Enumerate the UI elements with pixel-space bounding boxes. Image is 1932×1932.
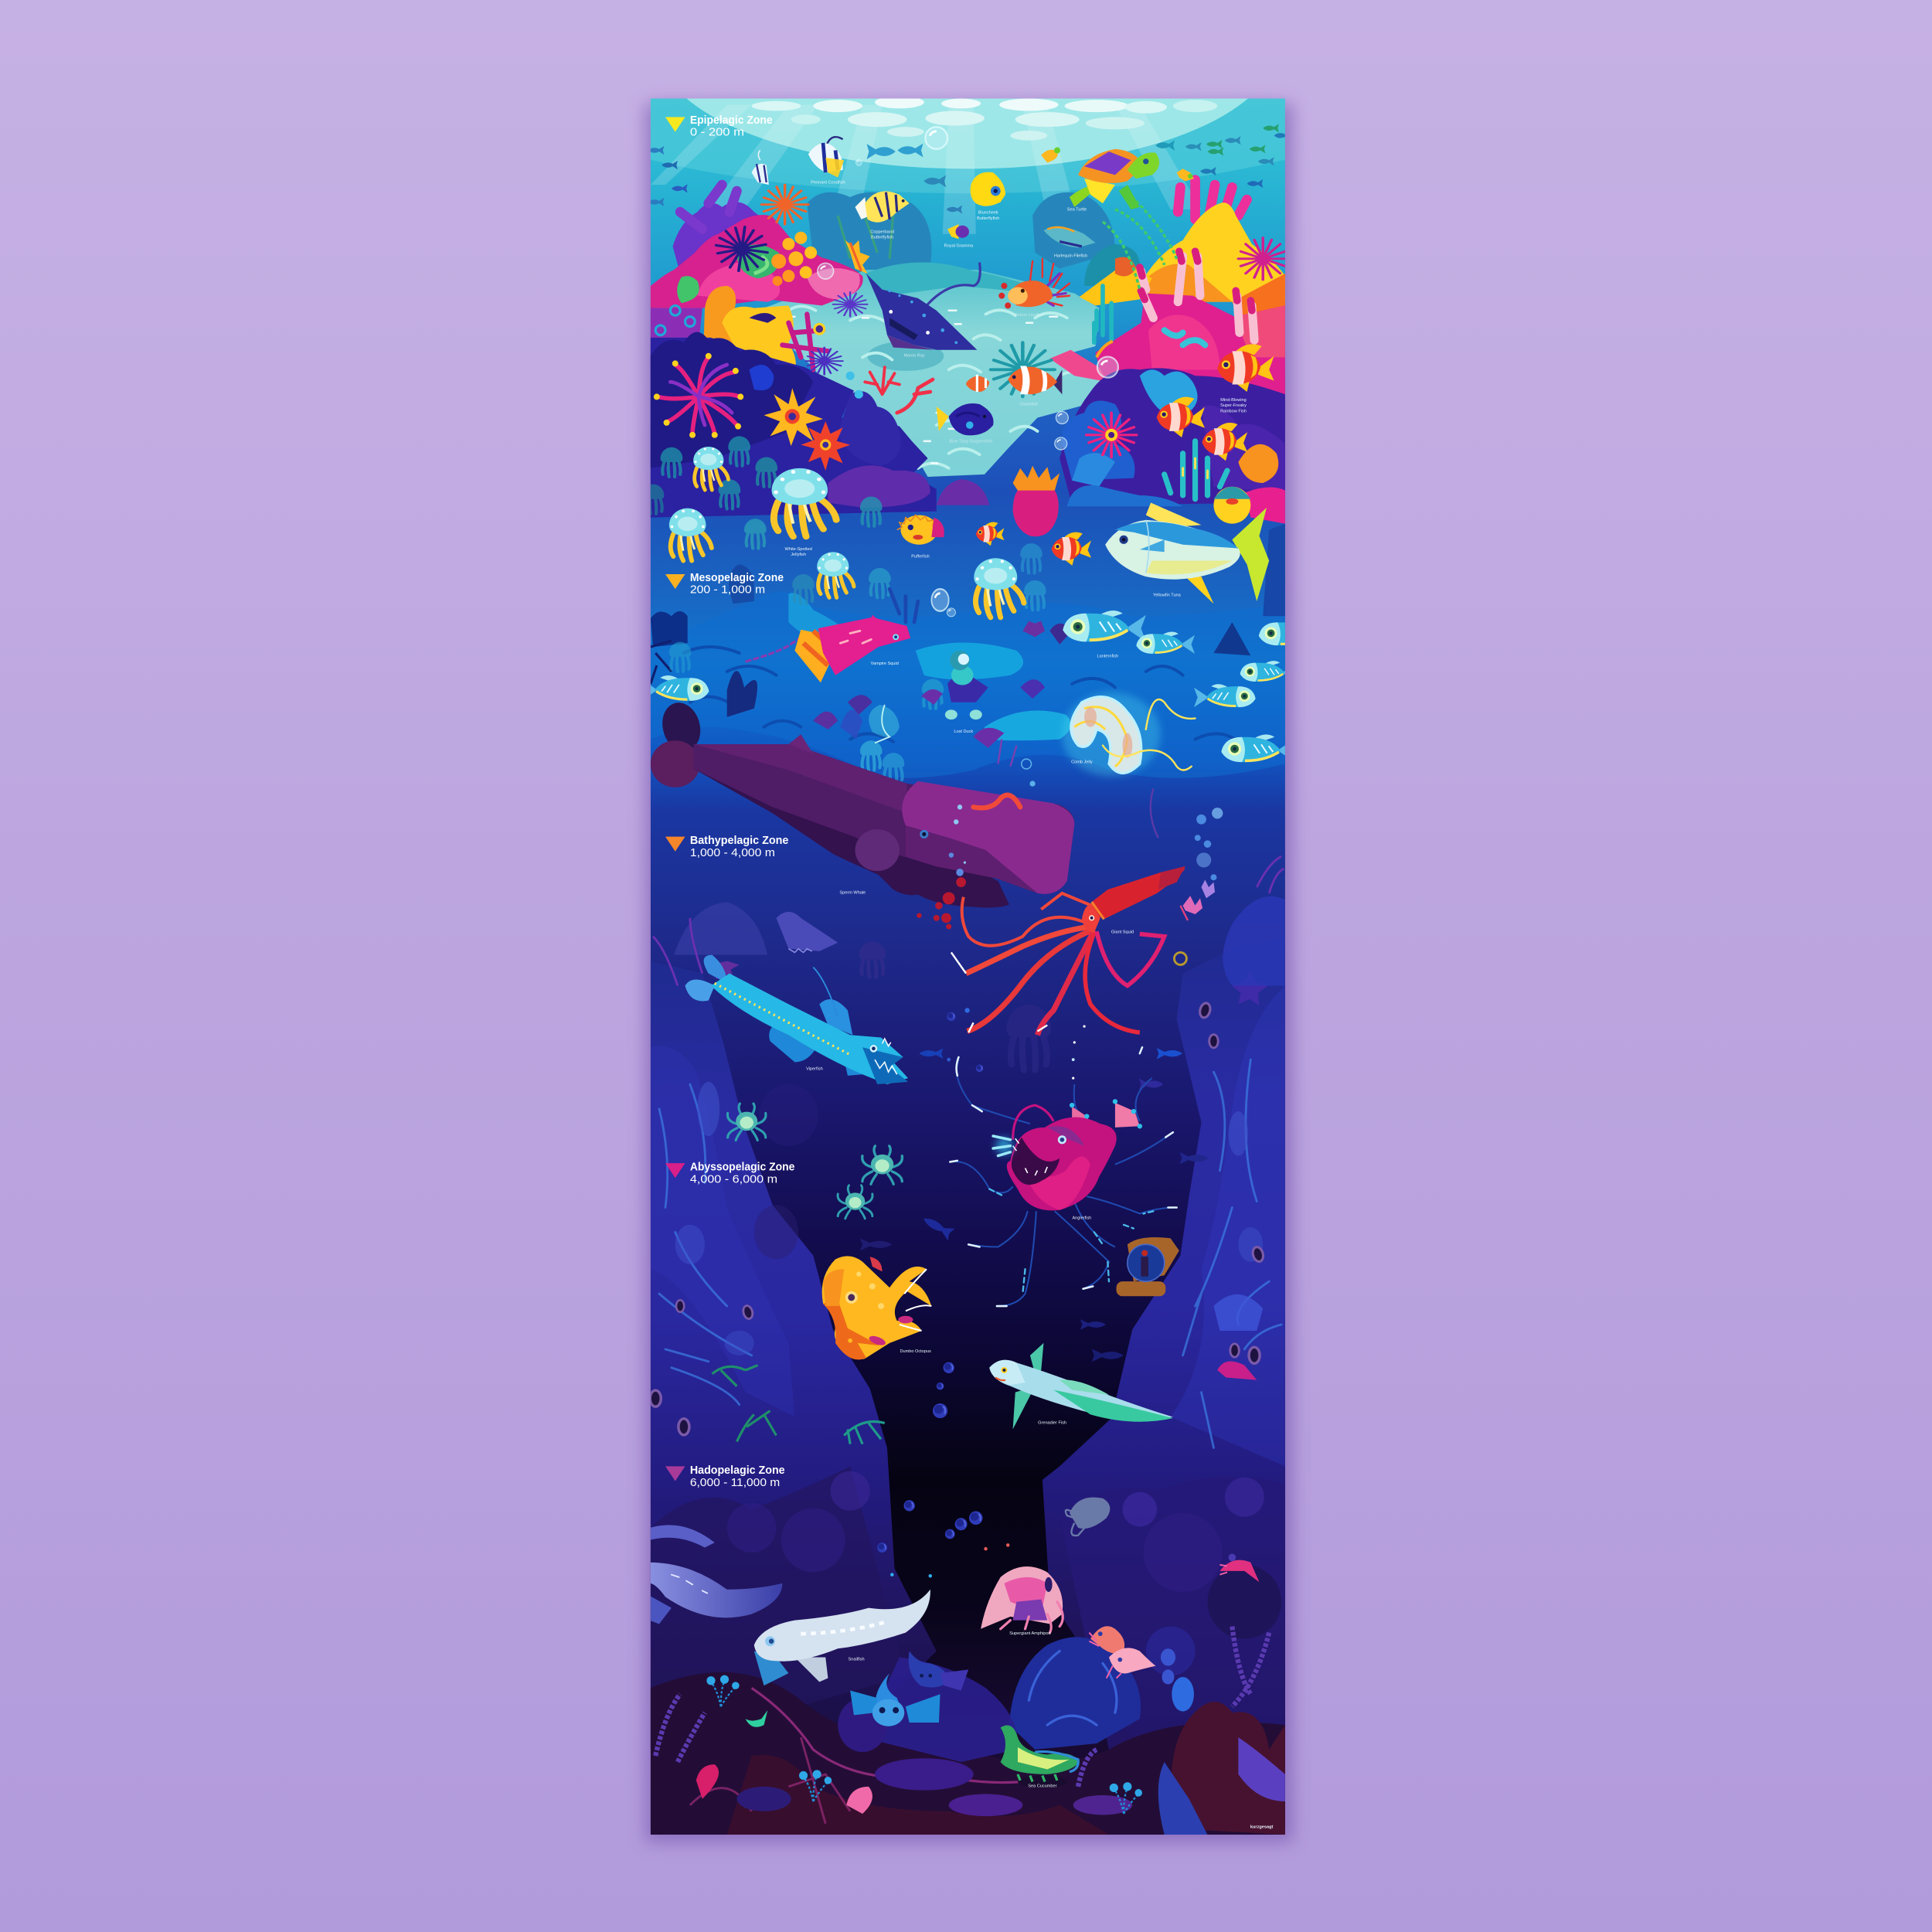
big anemone (658, 357, 740, 434)
species labels: Comb Jelly (1071, 760, 1093, 765)
zone label: bathypelagic (665, 834, 788, 859)
squid head (1082, 904, 1100, 933)
sponges (1197, 1001, 1213, 1020)
species labels: Butterflyfish (871, 236, 893, 240)
cyan flowers (670, 305, 680, 315)
red anemone (1013, 485, 1059, 536)
species labels: kurzgesagt (1250, 1825, 1274, 1829)
species labels: Giant Squid (1111, 930, 1134, 935)
viperfish (685, 955, 908, 1084)
pufferfish (897, 515, 944, 545)
bluecheek butterflyfish (971, 172, 1005, 206)
pink flower (1087, 413, 1137, 457)
copperband butterflyfish (855, 191, 910, 223)
bottom hermit (846, 1787, 872, 1814)
tube corals (1141, 257, 1254, 340)
deep rock walls (648, 937, 1285, 1750)
species labels: Supergiant Amphipod (1009, 1631, 1051, 1636)
bottom base (651, 1672, 1285, 1835)
sea cucumber (1001, 1725, 1080, 1787)
zone label: mesopelagic: 200 - 1,000 m (690, 583, 765, 597)
zone label: hadopelagic: Hadopelagic Zone (690, 1464, 785, 1477)
species labels: White-Spotted (784, 547, 812, 552)
pink crab coral (749, 313, 776, 323)
dumbo octopus (822, 1256, 931, 1359)
small blue hill (1067, 485, 1183, 506)
species labels: Yellowfin Tuna (1153, 594, 1182, 598)
species labels: Blue Tang Surgeonfish (949, 439, 992, 444)
eye (920, 830, 928, 838)
species labels: Vampire Squid (871, 662, 899, 666)
grenadier fish (989, 1343, 1173, 1429)
maroon corals (1171, 1702, 1285, 1835)
anemone urchin (991, 342, 1055, 396)
cyan branching coral (1165, 441, 1227, 499)
pink coral (1095, 293, 1285, 400)
eyes in the dark (890, 1543, 1009, 1577)
species labels: Sea Turtle (1067, 208, 1087, 213)
comb jelly (1062, 692, 1196, 776)
species labels: Manta Ray (904, 354, 925, 359)
anemone right (1238, 238, 1287, 280)
purple coral (672, 202, 759, 267)
species labels: Debon Lionfish (1015, 313, 1043, 318)
right rock wall (1043, 937, 1285, 1750)
distant mid reef (807, 192, 1115, 277)
species labels: Copperband (870, 230, 894, 234)
left rock wall (651, 961, 937, 1750)
species labels: Jellyfish (791, 553, 806, 557)
starfish anemones (764, 388, 823, 446)
species labels: Butterflyfish (977, 216, 999, 221)
species labels (784, 181, 1274, 1829)
zone label: abyssopelagic: 4,000 - 6,000 m (690, 1173, 777, 1186)
red coral (761, 185, 808, 224)
species labels: Viperfish (806, 1067, 823, 1072)
purple shrimp on right wall (1217, 1361, 1257, 1380)
vampire squid (746, 615, 910, 682)
species labels: Harlequin Filefish (1054, 253, 1087, 258)
tuna body (1105, 520, 1240, 580)
cyan coral (1094, 286, 1111, 342)
yellow tower (1140, 202, 1285, 302)
crabs (727, 1104, 902, 1219)
blue tang surgeonfish (937, 403, 994, 435)
distant fish (648, 124, 1290, 214)
species labels: Sperm Whale (839, 891, 866, 896)
blue-topped pufferfish (1213, 487, 1250, 524)
seaweed (1103, 192, 1177, 290)
zone label: abyssopelagic (665, 1161, 794, 1186)
species labels: Sea Cucumber (1028, 1784, 1057, 1789)
species labels: Clownfish (1019, 403, 1038, 407)
zone label: mesopelagic: Mesopelagic Zone (690, 571, 784, 584)
whale head (902, 781, 1074, 894)
species labels: Bluecheek (978, 211, 998, 216)
blue glowing blobs (1172, 1677, 1194, 1712)
ghost jelly (1066, 1497, 1110, 1536)
striped fans (655, 1627, 1269, 1787)
pink fingers (1178, 180, 1247, 219)
species labels: Pennant Coralfish (811, 181, 845, 185)
ocean depth gradient (651, 99, 1285, 1835)
zone label: epipelagic: Epipelagic Zone (690, 114, 773, 127)
urchin (714, 226, 769, 272)
red ink (917, 877, 966, 929)
left reef (649, 185, 937, 518)
anglerfish (950, 1026, 1177, 1306)
reef bubbles and shells (727, 127, 1072, 767)
hadal eels (649, 1525, 782, 1624)
royal gramma (947, 224, 969, 239)
green seaweed crabs (713, 1366, 758, 1386)
snailfish (754, 1590, 930, 1685)
tail fluke upper (657, 699, 706, 756)
species labels: Lost Duck (954, 730, 973, 734)
clownfish (966, 366, 1062, 394)
lionfish (998, 259, 1070, 308)
ghost creatures of the bathypelagic (653, 788, 1285, 1070)
angler lure (1013, 1105, 1053, 1140)
purple urchin small (833, 292, 867, 317)
supergiant amphipod (981, 1566, 1063, 1633)
sea sponge clusters (782, 238, 794, 250)
species labels: Lanternfish (1097, 655, 1118, 659)
blue rock (1009, 1637, 1141, 1750)
pennant coralfish (752, 137, 844, 185)
red branching coral (865, 367, 900, 394)
white-spotted jellies and faint jellies (642, 436, 1046, 782)
angler body (1007, 1117, 1117, 1210)
squid mantle (1092, 869, 1185, 919)
ghost ammonite shapes (759, 1084, 818, 1146)
bioluminescent filaments (950, 1047, 1177, 1306)
sperm whale (651, 699, 1074, 929)
tentacle scar (974, 795, 1020, 808)
mesopelagic seabed (651, 524, 1285, 778)
blue deep fish (850, 1651, 968, 1726)
species labels: Super-Freaky (1220, 403, 1247, 408)
hadal rocks and seabed (651, 1466, 1285, 1835)
small red shrimp (897, 379, 933, 413)
small dark fish (860, 1008, 1236, 1561)
manta ray (866, 263, 980, 350)
yellow mound (1080, 261, 1152, 305)
sunlit surface (651, 99, 1285, 234)
zone label: hadopelagic (665, 1464, 785, 1489)
species labels: Rainbow Fish (1220, 409, 1247, 413)
species labels: Royal Gramma (944, 244, 974, 249)
whale body (694, 744, 1074, 894)
giant squid (951, 866, 1185, 1035)
lost duck diver (937, 651, 988, 719)
zone label: abyssopelagic: Abyssopelagic Zone (690, 1161, 794, 1174)
purple slug right (1238, 1737, 1285, 1801)
left purple edge (649, 308, 702, 369)
tail fluke lower (651, 740, 700, 787)
orange and yellow coral (703, 286, 736, 345)
poster (651, 99, 1285, 1835)
lanternfish shoal (641, 611, 1327, 762)
zone label: bathypelagic: 1,000 - 4,000 m (690, 846, 775, 859)
zone label: epipelagic: 0 - 200 m (690, 125, 744, 138)
rainbow fish (976, 344, 1274, 566)
bubbles (957, 804, 962, 810)
species labels: Snailfish (849, 1657, 865, 1662)
species labels: Pufferfish (911, 554, 930, 559)
yellow flag coral (845, 240, 870, 274)
small green slug (746, 1710, 767, 1727)
viperfish body (711, 974, 908, 1084)
species labels: Grenadier Fish (1038, 1420, 1066, 1425)
sandy clearing (764, 244, 1140, 477)
yellowfin tuna (1105, 503, 1269, 604)
species labels: Anglerfish (1072, 1216, 1091, 1221)
pink shrimp bottom left (696, 1764, 719, 1799)
purple and blue coral bed (1060, 368, 1285, 505)
zone label: mesopelagic (665, 571, 784, 597)
sea turtle (1041, 148, 1194, 209)
harlequin filefish (1043, 227, 1095, 247)
dark navy reef (649, 338, 937, 518)
angler mouth (1012, 1138, 1060, 1185)
submersible (1117, 1237, 1179, 1296)
pink shrimps (1089, 1560, 1259, 1679)
zone label: bathypelagic: Bathypelagic Zone (690, 834, 788, 847)
whale lower body and jaw (694, 769, 1009, 908)
zone label: hadopelagic: 6,000 - 11,000 m (690, 1476, 780, 1489)
pink mound (649, 215, 863, 308)
fins (1072, 1107, 1094, 1131)
coral on rock (1213, 1294, 1263, 1331)
right reef (937, 180, 1287, 536)
zone label: epipelagic (665, 114, 773, 138)
species labels: Mind-Blowing (1220, 398, 1247, 403)
species labels: Dumbo Octopus (900, 1349, 931, 1354)
flipper (855, 829, 900, 871)
blue flowers (706, 1675, 740, 1706)
orange anemone (1238, 444, 1278, 483)
poster drop shadow (645, 104, 1293, 1842)
